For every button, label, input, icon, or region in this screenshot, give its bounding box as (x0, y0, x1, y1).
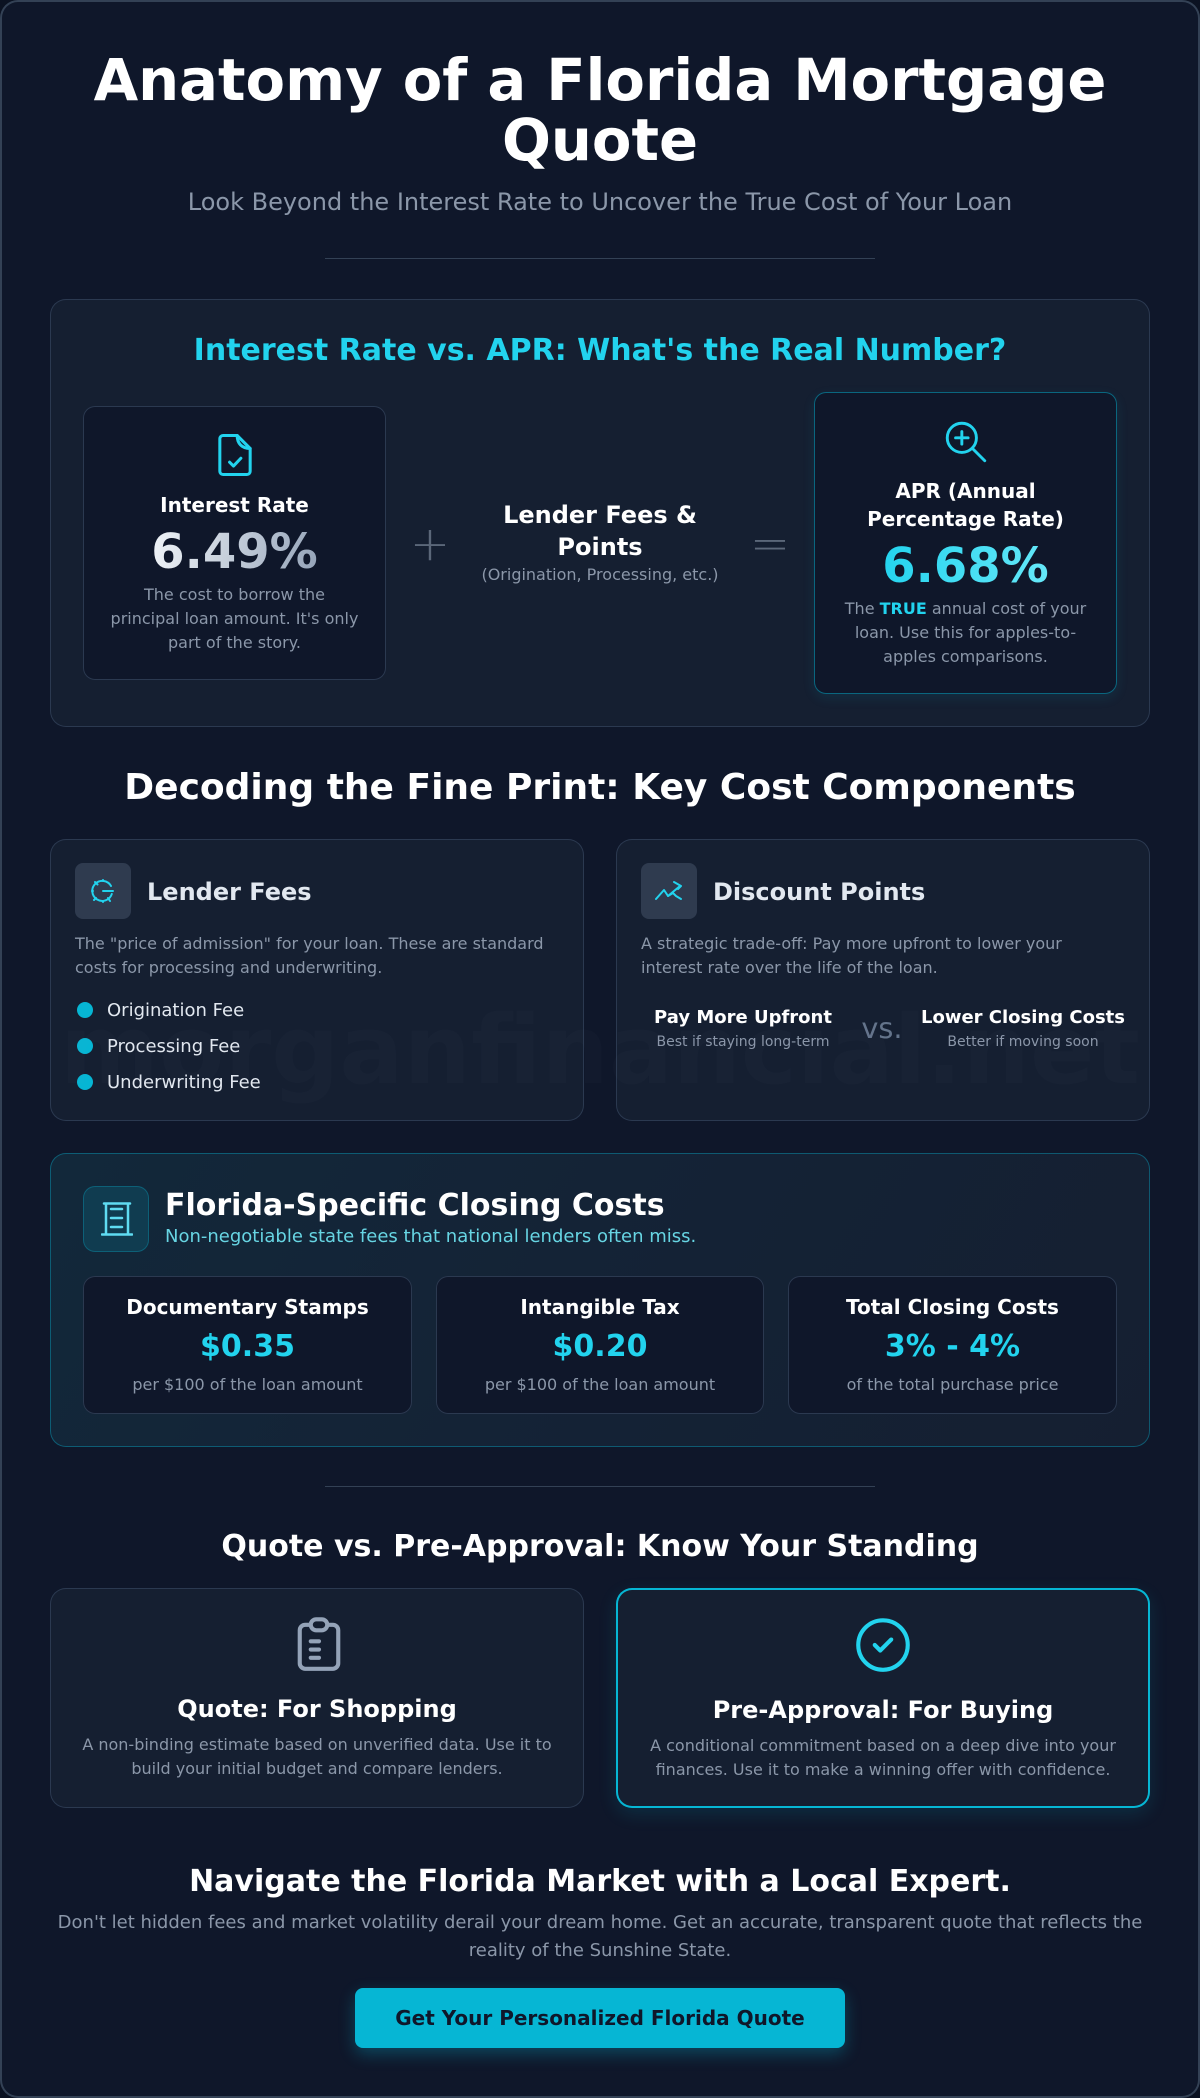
label: Percentage Rate) (867, 507, 1064, 531)
term note: (Origination, Processing, etc.) (481, 565, 719, 584)
panel: pre-approval (616, 1588, 1150, 1808)
label: Interest Rate (160, 493, 309, 517)
description: A strategic trade-off: Pay more upfront to lower your (641, 934, 1062, 953)
call to action text: reality of the Sunshine State. (469, 1940, 731, 1961)
title: Quote (502, 107, 698, 174)
description (111, 585, 358, 652)
description: A conditional commitment based on a deep dive into your (650, 1736, 1116, 1755)
term title (503, 501, 697, 561)
description (650, 1736, 1116, 1779)
bullet (77, 1038, 93, 1054)
section heading: fine print: Decoding the Fine Print: Key Cost Components (124, 767, 1076, 808)
description: The TRUE annual cost of your (845, 599, 1086, 618)
panel title: Florida-Specific Closing Costs (165, 1188, 665, 1223)
call to action heading: Navigate the Florida Market with a Local Expert. (189, 1864, 1011, 1899)
stat note: per $100 of the loan amount (132, 1375, 363, 1394)
term title: Points (557, 533, 643, 561)
description (844, 599, 1086, 666)
description: principal loan amount. It's only (111, 609, 358, 628)
stat: total closing costs (788, 1276, 1117, 1414)
term title: Lender Fees & (503, 501, 697, 529)
panel: quote (50, 1588, 584, 1808)
button: Get Your Personalized Florida Quote (395, 2006, 805, 2030)
panel: discount points (616, 839, 1150, 1121)
description: finances. Use it to make a winning offer with confidence. (656, 1760, 1110, 1779)
card title: Pre-Approval: For Buying (713, 1696, 1053, 1724)
section heading: quote vs pre-approval: Quote vs. Pre-Approval: Know Your Standing (221, 1529, 979, 1564)
watermark: morganfinancial.net (60, 996, 1140, 1106)
label: APR (Annual (895, 479, 1036, 503)
option title: Lower Closing Costs (921, 1007, 1125, 1028)
description (641, 934, 1062, 977)
list: fees (77, 1000, 261, 1093)
icon: magnifier (946, 422, 986, 462)
card title: Quote: For Shopping (177, 1695, 457, 1723)
stat note: per $100 of the loan amount (485, 1375, 715, 1394)
icon: check circle (856, 1618, 910, 1672)
stat label: Total Closing Costs (846, 1295, 1059, 1319)
panel: interest rate vs APR (50, 299, 1150, 727)
stat value: 3% - 4% (885, 1329, 1020, 1364)
stat: intangible tax (436, 1276, 764, 1414)
option: lower closing costs (921, 1007, 1125, 1050)
title: Anatomy of a Florida Mortgage (94, 47, 1106, 114)
operator: equals: = (750, 516, 790, 572)
description: loan. Use this for apples-to- (855, 623, 1076, 642)
button (355, 1988, 845, 2048)
description: build your initial budget and compare lenders. (131, 1759, 503, 1778)
list item: Origination Fee (107, 1000, 244, 1021)
panel: lender fees (50, 839, 584, 1121)
versus label: vs. (861, 1011, 903, 1045)
stat label: Intangible Tax (520, 1295, 680, 1319)
stat note: of the total purchase price (847, 1375, 1058, 1394)
stat value: $0.35 (200, 1329, 295, 1364)
bullet (77, 1002, 93, 1018)
option: pay more upfront (654, 1007, 832, 1050)
operator: plus: + (410, 516, 450, 572)
value: 6.49%: 6.49% (151, 524, 318, 580)
stat value: $0.20 (553, 1329, 647, 1364)
option note: Best if staying long-term (656, 1034, 829, 1050)
option title: Pay More Upfront (654, 1007, 832, 1028)
option note: Better if moving soon (947, 1034, 1099, 1050)
description: interest rate over the life of the loan. (641, 958, 938, 977)
card: APR (814, 392, 1117, 694)
panel heading: Interest Rate vs. APR: What's the Real Number? (194, 333, 1006, 368)
icon: trend (641, 863, 697, 919)
label (867, 479, 1064, 531)
stat label: Documentary Stamps (126, 1295, 369, 1319)
call to action text: Don't let hidden fees and market volatility derail your dream home. Get an accurate, transparent quote that reflects the (58, 1912, 1142, 1933)
card title: Lender Fees (147, 878, 312, 906)
card title: Discount Points (713, 878, 925, 906)
description: The "price of admission" for your loan. These are standard (75, 934, 544, 953)
panel: Florida closing costs (50, 1153, 1150, 1447)
call to action text (58, 1912, 1142, 1961)
description: The cost to borrow the (144, 585, 325, 604)
description: A non-binding estimate based on unverified data. Use it to (82, 1735, 552, 1754)
icon: document check (218, 434, 252, 476)
description (74, 934, 544, 977)
list item: Underwriting Fee (107, 1072, 261, 1093)
description: part of the story. (168, 633, 301, 652)
icon: clipboard (298, 1617, 340, 1671)
description: costs for processing and underwriting. (75, 958, 382, 977)
panel subtitle: Non-negotiable state fees that national lenders often miss. (165, 1226, 696, 1247)
icon: cog refresh (75, 863, 131, 919)
title (94, 47, 1106, 174)
description: apples comparisons. (883, 647, 1048, 666)
term: lender fees and points (481, 501, 719, 584)
stat: documentary stamps (83, 1276, 412, 1414)
bullet (77, 1074, 93, 1090)
description (82, 1735, 552, 1778)
card: interest rate (83, 406, 386, 680)
value: 6.68%: 6.68% (882, 538, 1049, 594)
subtitle: Look Beyond the Interest Rate to Uncover the True Cost of Your Loan (188, 188, 1012, 216)
list item: Processing Fee (107, 1036, 240, 1057)
icon: scroll (83, 1186, 149, 1252)
